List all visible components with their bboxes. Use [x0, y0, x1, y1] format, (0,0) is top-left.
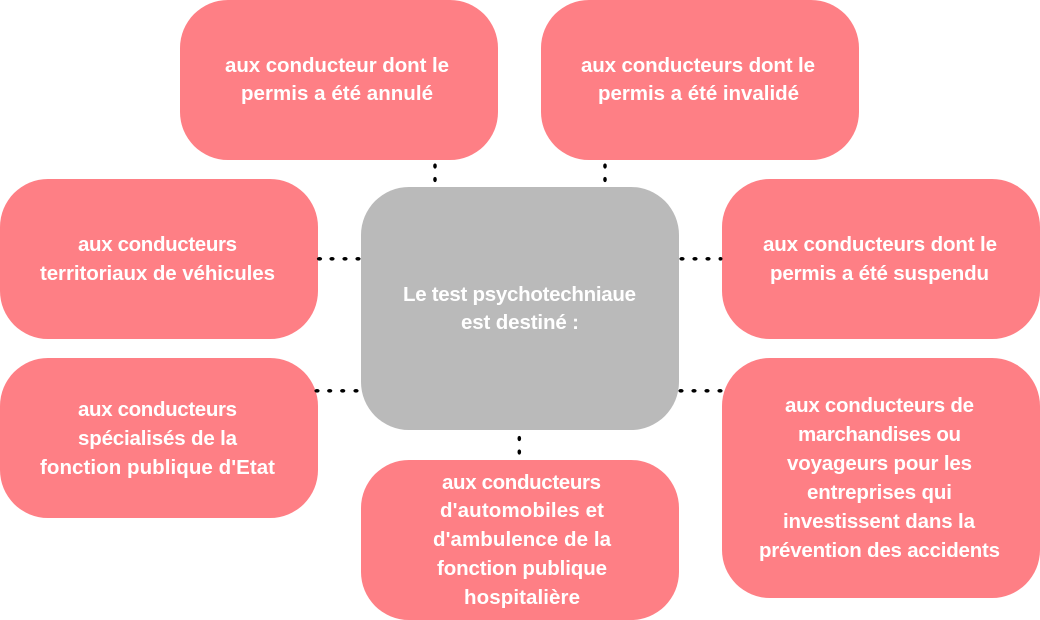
- panel: central question: est destiné :: [461, 311, 579, 334]
- connector: top left: [433, 163, 437, 182]
- panel: permis suspendu: aux conducteurs dont le: [763, 233, 997, 256]
- panel: fonction publique hospitalière: d'ambulence de la: [433, 528, 612, 551]
- connector: left lower: [314, 389, 359, 393]
- panel: marchandises ou voyageurs: voyageurs pour les: [787, 452, 972, 475]
- panel: fonction publique hospitalière: fonction publique: [437, 557, 607, 580]
- panel: fonction publique hospitalière: [361, 460, 679, 620]
- connector: top right: [603, 163, 607, 182]
- panel: fonction publique d'Etat: spécialisés de la: [78, 427, 238, 450]
- panel: central question: [361, 187, 679, 430]
- panel: marchandises ou voyageurs: entreprises qui: [807, 481, 952, 504]
- panel: permis annulé: [180, 0, 498, 160]
- panel: central question: Le test psychotechniaue: [403, 283, 636, 306]
- panel: permis annulé: permis a été annulé: [241, 82, 433, 105]
- panel: fonction publique d'Etat: aux conducteurs: [78, 398, 237, 421]
- panel: fonction publique d'Etat: fonction publique d'Etat: [40, 456, 275, 479]
- panel: marchandises ou voyageurs: marchandises ou: [798, 423, 961, 446]
- panel: permis suspendu: permis a été suspendu: [770, 262, 989, 285]
- panel: conducteurs territoriaux: aux conducteurs: [78, 233, 237, 256]
- panel: conducteurs territoriaux: [0, 179, 318, 339]
- panel: conducteurs territoriaux: territoriaux de véhicules: [40, 262, 275, 285]
- connector: right lower: [678, 389, 723, 393]
- panel: fonction publique d'Etat: [0, 358, 318, 518]
- panel: marchandises ou voyageurs: [722, 358, 1040, 598]
- connector: right upper: [679, 257, 722, 261]
- panel: marchandises ou voyageurs: aux conducteurs de: [785, 394, 974, 417]
- panel: permis invalidé: [541, 0, 859, 160]
- connector: left upper: [317, 257, 361, 261]
- panel: permis invalidé: aux conducteurs dont le: [581, 54, 815, 77]
- panel: permis suspendu: [722, 179, 1040, 339]
- panel: permis invalidé: permis a été invalidé: [598, 82, 799, 105]
- panel: marchandises ou voyageurs: prévention des accidents: [759, 539, 1000, 562]
- panel: fonction publique hospitalière: hospitalière: [464, 586, 580, 609]
- panel: marchandises ou voyageurs: investissent dans la: [783, 510, 976, 533]
- panel: permis annulé: aux conducteur dont le: [225, 54, 449, 77]
- connector: bottom: [518, 436, 521, 455]
- panel: fonction publique hospitalière: d'automobiles et: [440, 499, 604, 522]
- panel: fonction publique hospitalière: aux conducteurs: [442, 471, 601, 494]
